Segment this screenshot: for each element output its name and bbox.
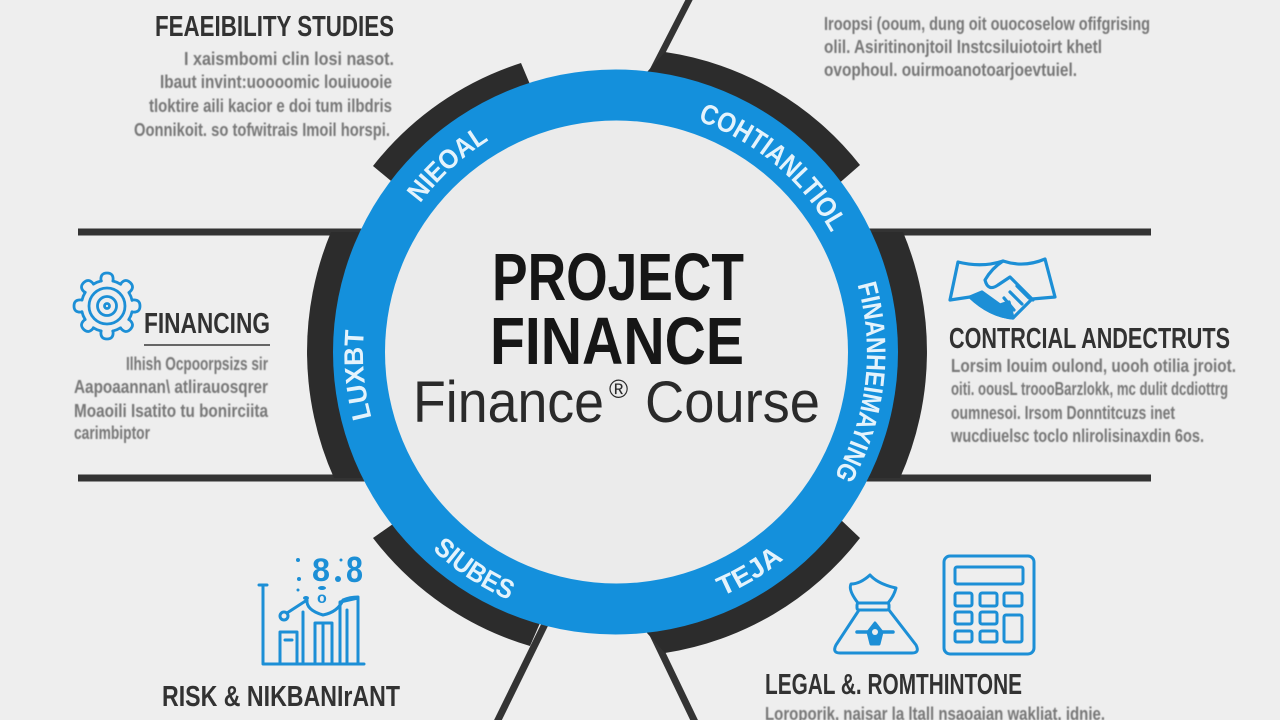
- contractual body text: oumnesoi. Irsom Donntitcuzs inet: [951, 403, 1175, 423]
- blue ring: [333, 70, 898, 634]
- heading: legal: LEGAL &. ROMTHINTONE: [765, 669, 1022, 701]
- central title: ®: [609, 374, 628, 404]
- outer dark ring segments: [307, 52, 927, 653]
- icon: handshake: [950, 259, 1055, 318]
- icon: calculator: [944, 556, 1034, 654]
- financing body text: carimbiptor: [74, 423, 150, 443]
- ring labels: FINANHEIMAYING: [837, 281, 886, 482]
- panel: feasibility studies: I xaismbomi clin losi nasot.: [184, 49, 394, 69]
- icon: money bag: [835, 575, 917, 653]
- contractual body text: wucdiuelsc toclo nlirolisinaxdin 6os.: [950, 426, 1204, 446]
- panel: top right text: [824, 14, 1150, 80]
- panel: feasibility studies: FEAEIBILITY STUDIES: [155, 11, 394, 43]
- icon: bar chart with coins: o: [317, 590, 327, 607]
- panel: top right text: ovophoul. ouirmoanotoarjoevtuiel.: [824, 60, 1077, 80]
- ring labels: NIEOAL: [406, 130, 488, 202]
- panel: feasibility studies: Ibaut invint:uoooomic louiuooie: [160, 72, 392, 92]
- icon: gear: [74, 273, 140, 339]
- heading: risk: RISK & NIKBANIrANT: [162, 681, 400, 713]
- financing body text: Aapoaannan\ atlirauosqrer: [74, 377, 268, 397]
- central title: Course: [645, 370, 820, 435]
- central title: PROJECT: [492, 240, 744, 315]
- ring labels: COHTIANLTIOL: [701, 105, 843, 232]
- icon: bar chart with coins: 8: [346, 549, 363, 590]
- icon: bar chart with coins: 8: [312, 552, 330, 588]
- panel: contractual: [949, 259, 1236, 446]
- ring labels: [344, 105, 886, 598]
- central title: FINANCE: [490, 304, 744, 379]
- ring labels: TEJA: [714, 549, 784, 594]
- financing body text: [74, 354, 269, 443]
- financing body text: Ilhish Ocpoorpsizs sir: [126, 354, 268, 374]
- contractual body text: Lorsim Iouim oulond, uooh otilia jroiot.: [951, 356, 1236, 376]
- heading: financing: FINANCING: [144, 308, 270, 340]
- panel: top right text: Iroopsi (ooum, dung oit ouocoselow ofifgrising: [824, 14, 1150, 34]
- divider under heading: [144, 344, 270, 346]
- ring labels: SIUBES: [435, 538, 514, 598]
- panel: risk and management: [162, 549, 400, 713]
- contractual body text: [950, 356, 1236, 446]
- ring labels: LUXBT: [344, 330, 372, 420]
- panel: financing: [74, 273, 270, 443]
- panel: feasibility studies: Oonnikoit. so tofwitrais Imoil horspi.: [134, 120, 390, 140]
- panel: legal: [765, 556, 1105, 720]
- financing body text: Moaoili Isatito tu bonirciita: [74, 401, 269, 421]
- icon: bar chart with coins: [259, 549, 364, 664]
- panel: feasibility studies: [134, 11, 394, 140]
- panel: top right text: olil. Asiritinonjtoil Instcsiluiotoirt khetl: [824, 37, 1102, 57]
- panel: feasibility studies: tloktire aili kacior e doi tum ilbdris: [149, 96, 392, 116]
- central title: [413, 240, 820, 435]
- central title: Finance: [413, 370, 604, 435]
